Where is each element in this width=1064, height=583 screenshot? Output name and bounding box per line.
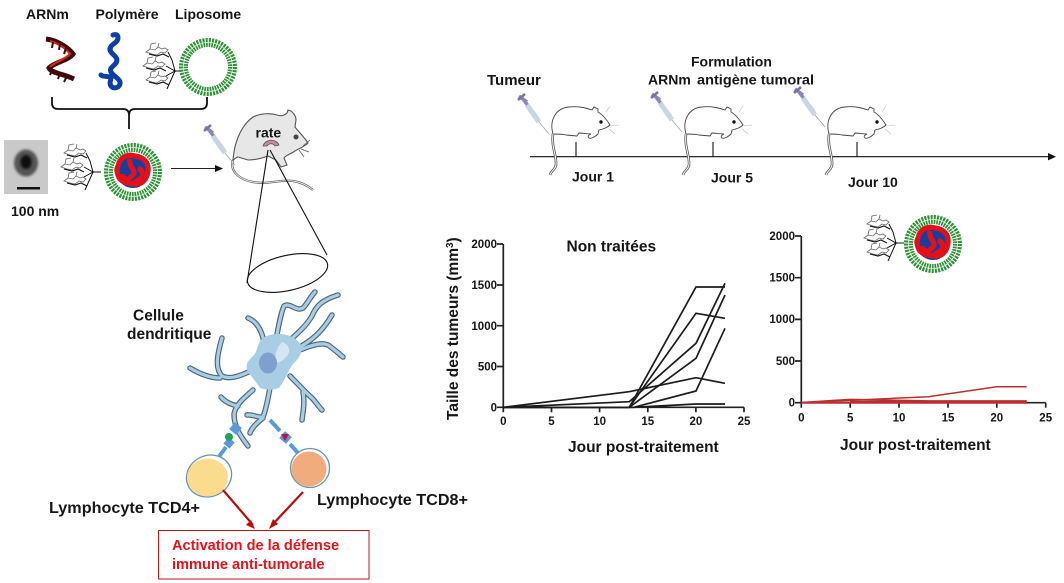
label: Cellule dendritique bbox=[127, 308, 212, 343]
y tick labels: 1500 bbox=[471, 280, 497, 292]
label: scale: 100 nm bbox=[11, 203, 59, 219]
icon: syringe bbox=[204, 125, 235, 165]
y tick labels: 1500 bbox=[769, 272, 795, 284]
y tick labels bbox=[471, 239, 497, 414]
callout: activation: Activation de la défense bbox=[172, 538, 339, 554]
y tick labels bbox=[769, 231, 795, 410]
y tick labels: 1000 bbox=[769, 314, 795, 326]
chart title: Non traitées bbox=[566, 238, 656, 256]
callout: activation bbox=[158, 530, 369, 579]
cone bbox=[244, 150, 331, 299]
icon: mRNA helix bbox=[46, 39, 74, 82]
y tick labels: 1000 bbox=[471, 321, 497, 333]
label: Jour 10: Jour 10 bbox=[848, 174, 898, 190]
label: ARNm antigène tumoral: antigène tumoral bbox=[697, 72, 814, 88]
label: Jour 1: Jour 1 bbox=[572, 168, 614, 184]
y tick labels: 500 bbox=[776, 356, 795, 368]
label: Jour 5: Jour 5 bbox=[711, 170, 753, 186]
icon: large mouse bbox=[232, 110, 313, 190]
x tick labels: 20 bbox=[690, 416, 702, 428]
icon: CD4 lymphocyte bbox=[179, 448, 239, 504]
y tick labels: 0 bbox=[491, 402, 497, 414]
receptor right bbox=[270, 420, 298, 453]
timeline axis bbox=[530, 142, 1056, 160]
arrow: CD8 to activation bbox=[269, 492, 303, 529]
icon: mouse day 10 bbox=[794, 87, 895, 175]
label: Formulation: Formulation bbox=[691, 54, 772, 70]
receptor left bbox=[218, 422, 242, 458]
chart: untreated bbox=[445, 237, 751, 456]
icon: mouse day 1 bbox=[518, 94, 619, 175]
x tick labels: 0 bbox=[798, 412, 805, 424]
label: Tumeur: Tumeur bbox=[487, 72, 541, 89]
x tick labels: 10 bbox=[893, 412, 905, 424]
x tick labels bbox=[500, 416, 751, 428]
series lines bbox=[503, 283, 725, 407]
icon: nanoparticle bbox=[61, 144, 158, 196]
icon: glycan on liposome bbox=[143, 43, 183, 89]
label: Cellule dendritique: dendritique bbox=[127, 326, 212, 343]
label: ARNm: ARNm bbox=[26, 6, 69, 22]
x tick labels: 25 bbox=[1039, 412, 1053, 424]
x tick labels bbox=[798, 412, 1053, 424]
y axis title: 3 bbox=[445, 242, 456, 248]
y axis title: Taille des tumeurs (mm bbox=[445, 248, 462, 420]
axes bbox=[497, 244, 744, 412]
label: Liposome: Liposome bbox=[175, 6, 241, 22]
x tick labels: 5 bbox=[847, 412, 854, 424]
label: Polymère: Polymère bbox=[96, 6, 159, 22]
x axis title: Jour post-traitement bbox=[568, 439, 719, 456]
label: ARNm antigène tumoral bbox=[648, 72, 814, 88]
x tick labels: 15 bbox=[942, 412, 955, 424]
y axis title: ) bbox=[445, 237, 462, 242]
arrow to mouse bbox=[171, 165, 223, 172]
x tick labels: 10 bbox=[593, 416, 606, 428]
y tick labels: 2000 bbox=[769, 231, 795, 243]
label: Cellule dendritique: Cellule bbox=[133, 308, 184, 324]
chart: treated bbox=[769, 215, 1053, 454]
x tick labels: 25 bbox=[738, 416, 751, 428]
bracket bbox=[52, 97, 207, 129]
y tick labels: 0 bbox=[789, 398, 795, 410]
label: rate: rate bbox=[256, 124, 281, 140]
icon: nanoparticle bbox=[864, 215, 958, 268]
x tick labels: 0 bbox=[500, 416, 507, 428]
x tick labels: 5 bbox=[548, 416, 555, 428]
series lines bbox=[801, 387, 1027, 403]
icon: dendritic cell bbox=[190, 292, 343, 446]
callout: activation: immune anti-tumorale bbox=[172, 557, 324, 573]
y tick labels: 500 bbox=[478, 362, 497, 374]
icon: mouse day 5 bbox=[651, 92, 752, 175]
axes bbox=[795, 236, 1046, 408]
icon: liposome bbox=[184, 42, 232, 92]
icon: polymer bbox=[101, 35, 120, 88]
x tick labels: 15 bbox=[641, 416, 655, 428]
arrow: CD4 to activation bbox=[223, 490, 255, 529]
y tick labels: 2000 bbox=[471, 239, 497, 251]
label: ARNm antigène tumoral: ARNm bbox=[648, 72, 691, 88]
label: TCD4: Lymphocyte TCD4+ bbox=[49, 500, 200, 517]
electron micrograph bbox=[4, 140, 48, 194]
label: TCD8: Lymphocyte TCD8+ bbox=[317, 492, 468, 509]
icon: CD8 lymphocyte bbox=[290, 448, 330, 488]
x axis title: Jour post-traitement bbox=[840, 437, 991, 454]
x tick labels: 20 bbox=[990, 412, 1003, 424]
